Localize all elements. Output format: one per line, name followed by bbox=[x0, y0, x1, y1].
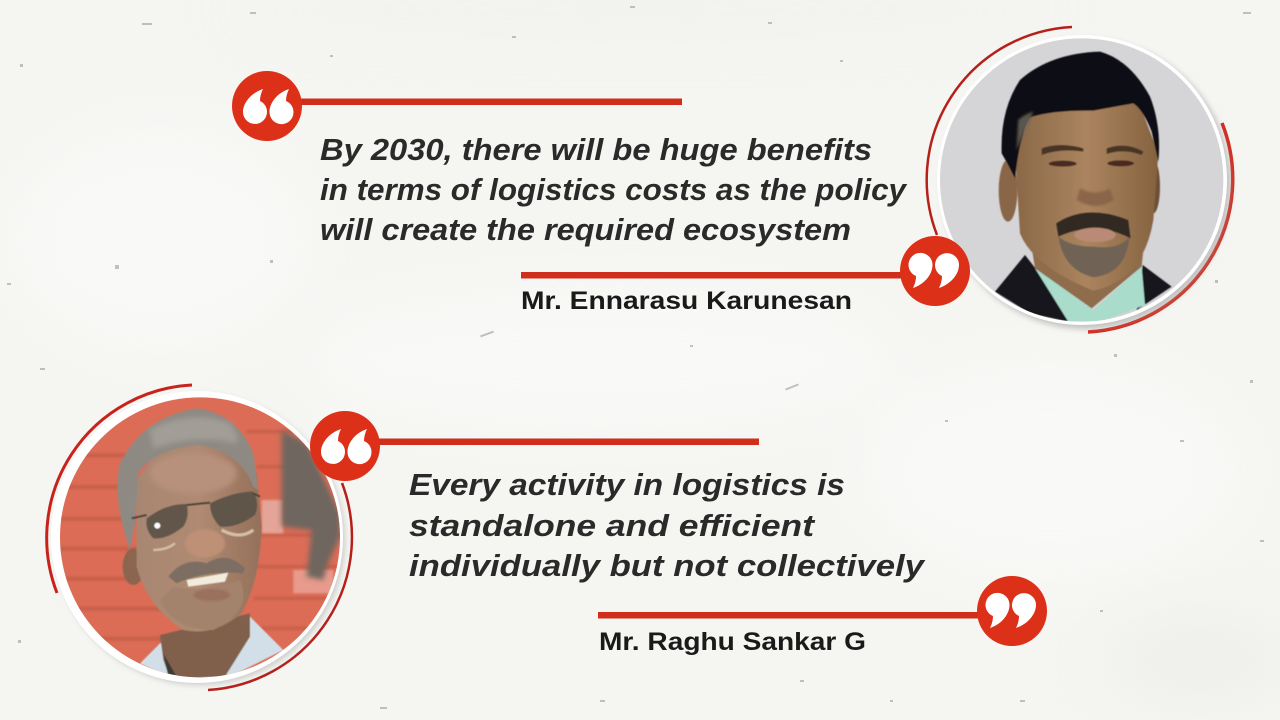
quote text bbox=[320, 132, 908, 247]
opening quote icon with rule bbox=[232, 71, 682, 141]
quote block: Raghu Sankar G bbox=[409, 467, 1047, 656]
closing rule and icon bbox=[598, 576, 1047, 646]
speaker name: Mr. Raghu Sankar G bbox=[599, 628, 866, 656]
portrait: Ennarasu Karunesan bbox=[927, 27, 1233, 333]
quote text: Every activity in logistics is bbox=[409, 467, 845, 502]
quote text: individually but not collectively bbox=[409, 548, 926, 583]
quote text: standalone and efficient bbox=[409, 508, 816, 543]
quote text bbox=[409, 467, 926, 583]
quote text: will create the required ecosystem bbox=[320, 212, 851, 247]
photo disc bbox=[55, 395, 345, 685]
quote block: Ennarasu Karunesan bbox=[232, 71, 908, 315]
decorative red arcs bbox=[47, 385, 352, 690]
portrait: Raghu Sankar G bbox=[47, 385, 357, 690]
closing quote icon: Ennarasu bbox=[900, 236, 970, 306]
quote text: in terms of logistics costs as the policy bbox=[320, 172, 908, 207]
quote text: By 2030, there will be huge benefits bbox=[320, 132, 872, 167]
closing rule bbox=[521, 272, 906, 278]
opening quote icon with rule: Raghu bbox=[310, 411, 759, 481]
speaker name: Mr. Ennarasu Karunesan bbox=[521, 287, 852, 315]
decorative red arcs bbox=[927, 27, 1233, 332]
photo disc bbox=[941, 39, 1231, 329]
